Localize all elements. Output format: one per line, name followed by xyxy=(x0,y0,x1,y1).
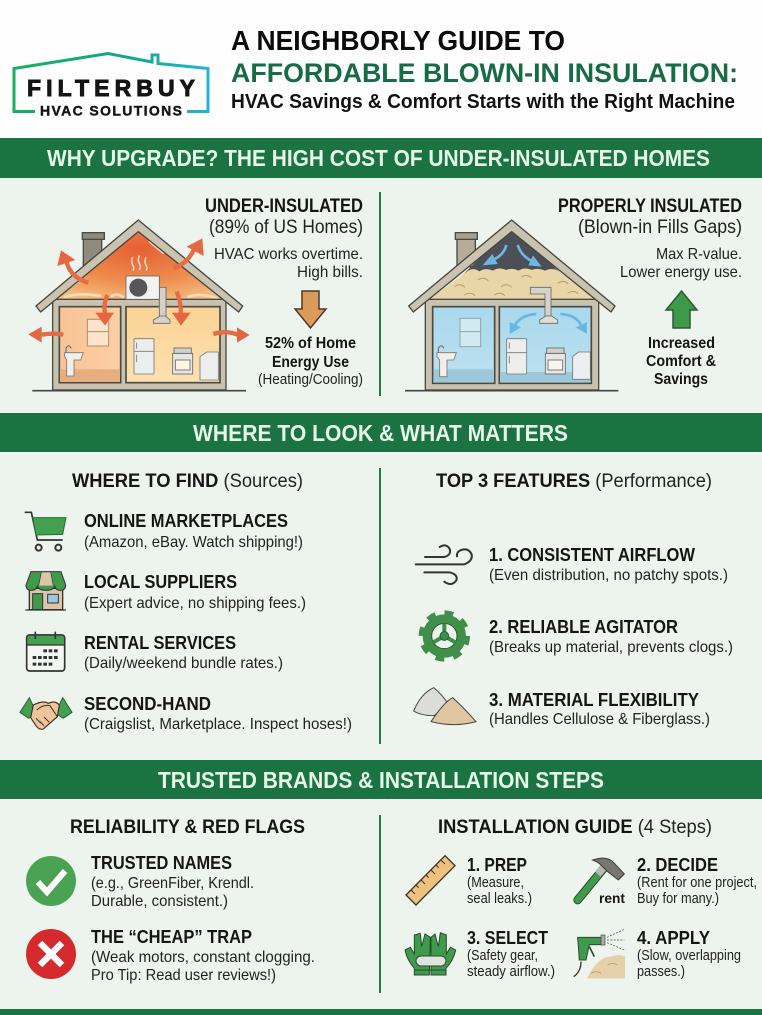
panel: where to find xyxy=(20,471,352,733)
step: prep: 1. PREP xyxy=(467,854,527,875)
item: reliable agitator xyxy=(422,613,733,659)
heading: where to find: WHERE TO FIND (Sources) xyxy=(72,471,303,492)
item: local suppliers xyxy=(25,571,306,612)
arrows: escaping heat xyxy=(28,238,250,343)
icon: hammer xyxy=(578,858,624,900)
item: rental services xyxy=(27,632,283,672)
title: A NEIGHBORLY GUIDE TO xyxy=(231,25,565,56)
item: material flexibility: (Handles Cellulose & Fiberglass.) xyxy=(489,711,710,728)
step: apply: 4. APPLY xyxy=(637,927,711,948)
text: increased comfort and savings: Comfort & xyxy=(646,353,716,370)
text: increased comfort and savings: Increased xyxy=(648,335,715,352)
divider xyxy=(379,815,381,993)
illustration: insulated house xyxy=(405,220,618,391)
text: properly insulated heading xyxy=(558,196,742,281)
item: the cheap trap xyxy=(26,926,315,984)
step: apply xyxy=(574,927,741,980)
icon: material piles xyxy=(414,688,476,725)
arrows: airflow xyxy=(483,245,587,334)
icon: gear xyxy=(422,613,467,659)
item: material flexibility xyxy=(414,688,710,728)
stat: 52% of home energy use xyxy=(258,335,363,388)
step: decide xyxy=(578,854,757,907)
icon: wind xyxy=(416,545,472,584)
title xyxy=(231,25,738,113)
icon: handshake xyxy=(20,698,72,729)
heading: top 3 features: TOP 3 FEATURES (Performance) xyxy=(436,471,712,492)
stat: 52% of home energy use: Energy Use xyxy=(272,354,349,371)
step: select: steady airflow.) xyxy=(467,963,555,980)
icon: storefront xyxy=(25,572,66,610)
item: reliable agitator: 2. RELIABLE AGITATOR xyxy=(489,616,678,637)
illustration: leaky house xyxy=(28,220,250,391)
section band: where to look: WHERE TO LOOK & WHAT MATTERS xyxy=(193,420,568,446)
step: apply: passes.) xyxy=(637,963,685,980)
item: online marketplaces: ONLINE MARKETPLACES xyxy=(84,510,288,531)
icon: shopping cart xyxy=(25,512,66,551)
text: properly insulated heading: (Blown-in Fills Gaps) xyxy=(578,216,742,238)
icon: spray gun xyxy=(574,929,625,978)
section band: trusted brands: TRUSTED BRANDS & INSTALLATION STEPS xyxy=(158,767,604,793)
title: AFFORDABLE BLOWN-IN INSULATION: xyxy=(231,58,738,88)
item: trusted names: Durable, consistent.) xyxy=(91,893,228,910)
item: online marketplaces xyxy=(25,510,303,551)
step: prep: seal leaks.) xyxy=(467,890,532,907)
logo: Filterbuy HVAC Solutions xyxy=(14,54,208,118)
text: properly insulated heading: Max R-value. xyxy=(656,246,742,263)
text: under-insulated heading: (89% of US Homes) xyxy=(209,216,363,238)
step: prep: (Measure, xyxy=(467,874,524,891)
icon: gloves xyxy=(405,933,456,975)
step: select xyxy=(405,927,555,980)
step: decide: 2. DECIDE xyxy=(637,854,718,875)
panel: reliability and red flags xyxy=(26,817,315,984)
heading: reliability: RELIABILITY & RED FLAGS xyxy=(70,817,305,838)
icon: calendar xyxy=(27,632,65,671)
item: the cheap trap: (Weak motors, constant clogging. xyxy=(91,949,315,966)
item: second-hand: SECOND-HAND xyxy=(84,693,211,714)
text: under-insulated heading: High bills. xyxy=(297,264,363,281)
item: consistent airflow: 1. CONSISTENT AIRFLOW xyxy=(489,544,695,565)
step: decide: rent xyxy=(599,890,625,906)
divider xyxy=(379,192,381,396)
item: consistent airflow: (Even distribution, no patchy spots.) xyxy=(489,567,728,584)
section band: trusted brands xyxy=(0,760,762,799)
heading: installation guide: INSTALLATION GUIDE (4 Steps) xyxy=(438,817,712,838)
item: consistent airflow xyxy=(416,544,728,584)
icon: red cross xyxy=(26,929,76,979)
item: rental services: (Daily/weekend bundle rates.) xyxy=(84,655,283,672)
icon: ruler xyxy=(406,856,455,905)
text: increased comfort and savings: Savings xyxy=(654,371,708,388)
item: the cheap trap: Pro Tip: Read user reviews!) xyxy=(91,967,276,984)
logo: Filterbuy HVAC Solutions: FILTERBUY xyxy=(27,75,195,101)
step: prep xyxy=(406,854,532,907)
section band: why upgrade: WHY UPGRADE? THE HIGH COST OF UNDER-INSULATED HOMES xyxy=(47,145,710,171)
text: under-insulated heading: UNDER-INSULATED xyxy=(205,196,363,217)
text: under-insulated heading xyxy=(205,196,363,281)
item: material flexibility: 3. MATERIAL FLEXIBILITY xyxy=(489,689,700,710)
item: the cheap trap: THE “CHEAP” TRAP xyxy=(91,926,252,947)
item: online marketplaces: (Amazon, eBay. Watch shipping!) xyxy=(84,534,303,551)
stat: 52% of home energy use: (Heating/Cooling) xyxy=(258,371,363,388)
header xyxy=(0,0,762,138)
text: under-insulated heading: HVAC works overtime. xyxy=(214,246,363,263)
step: select: (Safety gear, xyxy=(467,947,538,964)
item: reliable agitator: (Breaks up material, prevents clogs.) xyxy=(489,639,733,656)
item: local suppliers: LOCAL SUPPLIERS xyxy=(84,571,237,592)
footer band xyxy=(0,1009,762,1015)
item: rental services: RENTAL SERVICES xyxy=(84,632,236,653)
title: HVAC Savings & Comfort Starts with the Right Machine xyxy=(231,91,735,113)
item: second-hand: (Craigslist, Marketplace. Inspect hoses!) xyxy=(84,716,352,733)
step: select: 3. SELECT xyxy=(467,927,549,948)
panel: under-insulated house xyxy=(28,196,363,391)
item: trusted names: (e.g., GreenFiber, Krendl. xyxy=(91,875,254,892)
step: apply: (Slow, overlapping xyxy=(637,947,741,964)
section band: why upgrade xyxy=(0,138,762,178)
panel: installation guide xyxy=(405,817,757,980)
item: trusted names: TRUSTED NAMES xyxy=(91,852,232,873)
stat: 52% of home energy use: 52% of Home xyxy=(265,335,356,352)
item: local suppliers: (Expert advice, no shipping fees.) xyxy=(84,595,306,612)
panel: top 3 features xyxy=(414,471,733,728)
item: trusted names xyxy=(26,852,254,910)
icon: green check xyxy=(26,856,76,906)
logo: Filterbuy HVAC Solutions: HVAC SOLUTIONS xyxy=(40,102,182,118)
panel: properly insulated house xyxy=(405,196,742,391)
item: second-hand xyxy=(20,693,352,733)
arrow: down xyxy=(295,291,326,328)
section band: where to look xyxy=(0,413,762,452)
step: decide: Buy for many.) xyxy=(637,890,719,907)
divider xyxy=(379,468,381,744)
text: properly insulated heading: Lower energy use. xyxy=(620,264,742,281)
arrow: up xyxy=(666,291,697,328)
text: increased comfort and savings xyxy=(646,335,716,388)
